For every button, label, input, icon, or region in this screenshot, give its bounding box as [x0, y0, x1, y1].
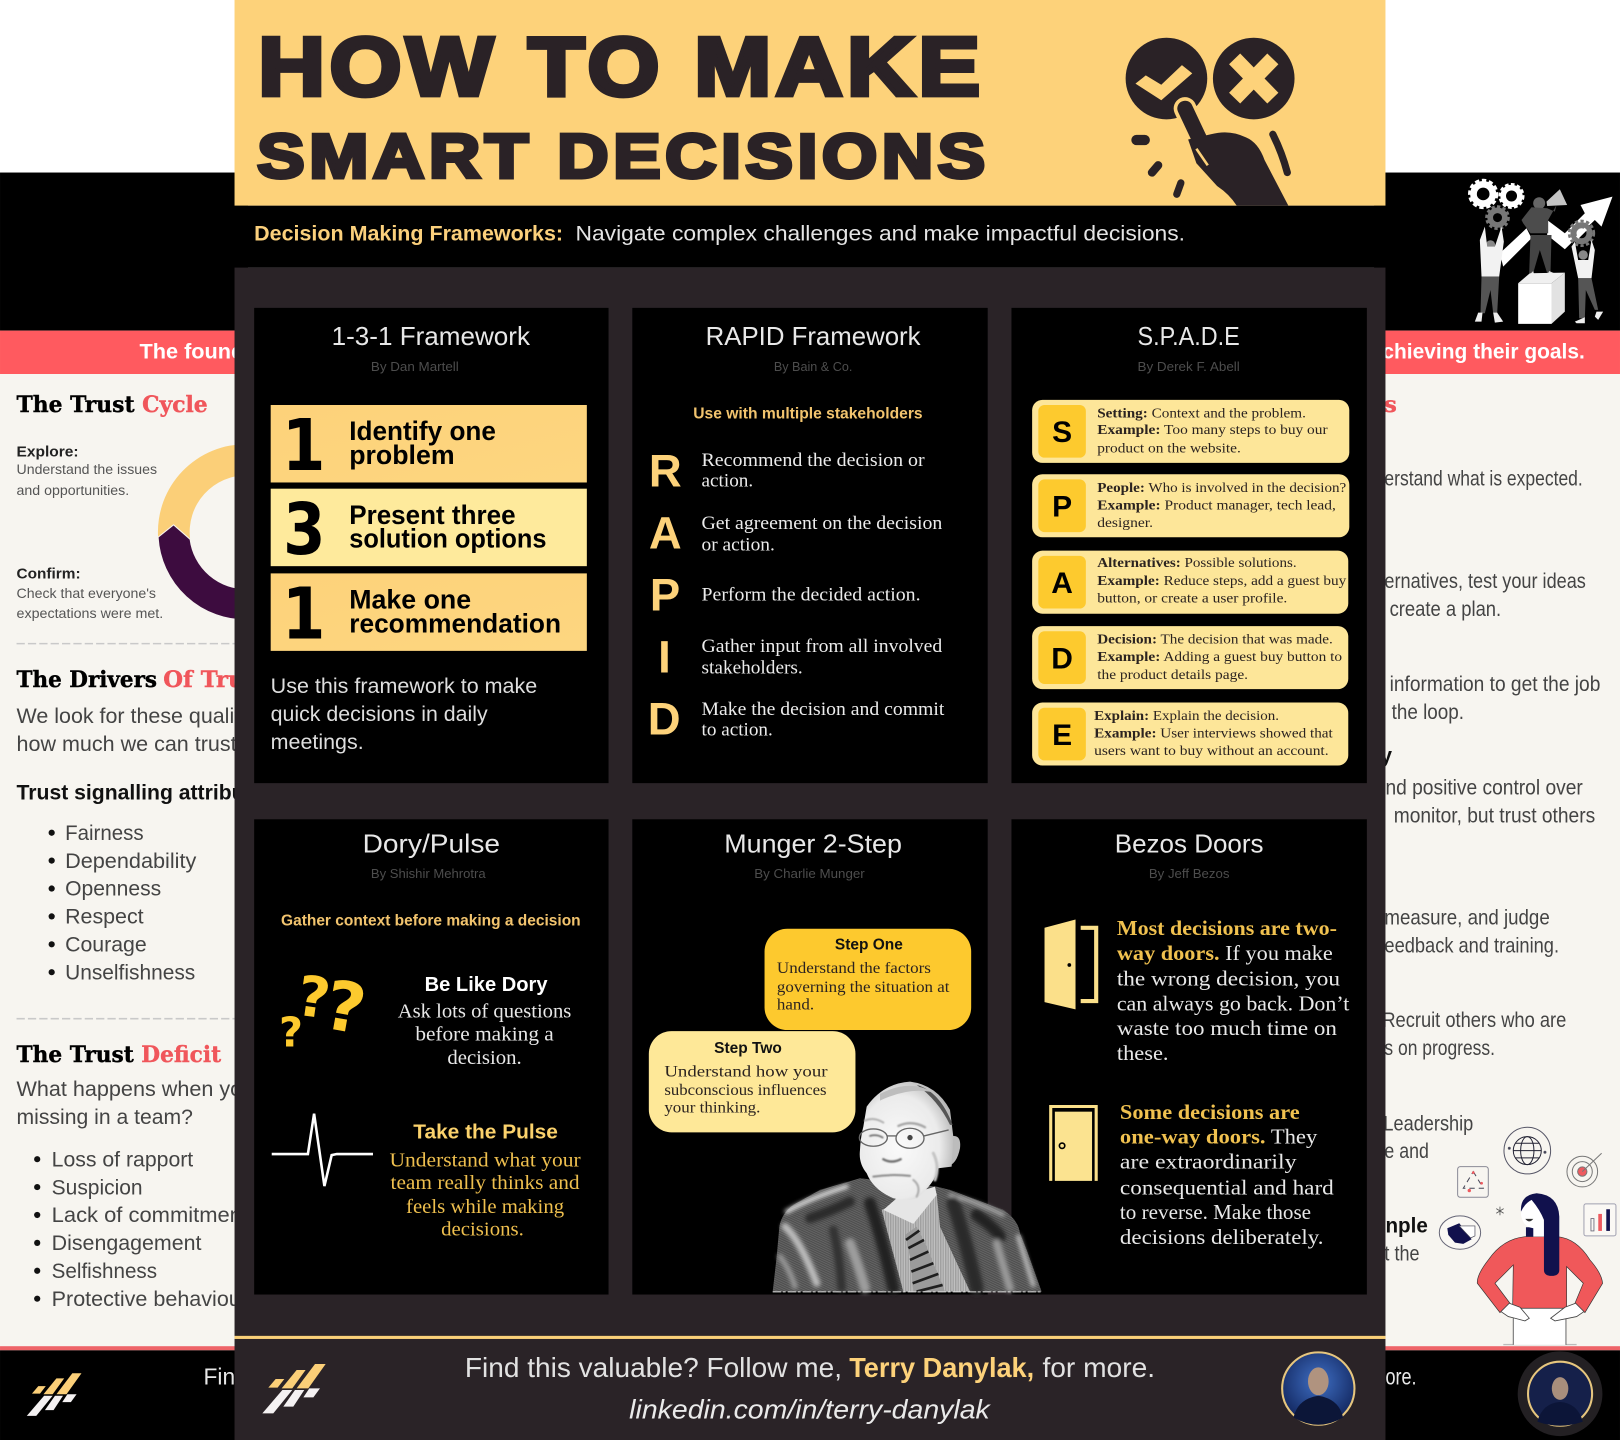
- icon: question marks: ?: [319, 966, 371, 1051]
- speech bubble: step one: governing the situation at: [777, 979, 950, 996]
- panel: Munger 2-Step: [632, 819, 988, 1295]
- gear above right person: [1569, 221, 1594, 246]
- icon: bar chart: [1584, 1204, 1616, 1236]
- RAPID descriptions: Gather input from all involved: [702, 636, 943, 657]
- icon: pulse line: [272, 1114, 373, 1186]
- header band: [235, 0, 1385, 206]
- avatar: author: [1282, 1352, 1354, 1425]
- background: right infographic page: s: [1384, 392, 1397, 418]
- Be Like Dory: [398, 973, 571, 1069]
- RAPID descriptions: or action.: [702, 535, 775, 556]
- row: alternatives: A: [1051, 567, 1073, 600]
- speech bubble: step two: Understand how your: [664, 1064, 829, 1081]
- background: right infographic page: s on progress.: [1384, 1037, 1495, 1060]
- follow call to action: Find this valuable? Follow me,: [465, 1352, 842, 1383]
- background: right infographic page: t the: [1384, 1242, 1420, 1265]
- icon: recycle box: [1458, 1167, 1488, 1197]
- subtitle: Navigate complex challenges and make impactful decisions.: [575, 221, 1185, 246]
- box: [1518, 273, 1565, 324]
- panel: Dory/Pulse: By Shishir Mehrotra: [371, 866, 486, 881]
- background: right infographic page: information to get the job: [1390, 673, 1600, 696]
- portrait: Charlie Munger sketch: [773, 1082, 1042, 1292]
- background: left infographic page: Loss of rapport: [52, 1148, 193, 1171]
- step: make one recommendation: [271, 572, 587, 655]
- icon: target: [1567, 1153, 1602, 1187]
- man with megaphone on box: [1522, 189, 1567, 277]
- step: make one recommendation: recommendation: [349, 608, 561, 638]
- usage note: meetings.: [271, 729, 364, 754]
- background: right infographic page: chieving their goals.: [1382, 339, 1585, 364]
- row: decision: [1032, 626, 1348, 689]
- icon: open door: [1045, 920, 1096, 1009]
- panel: RAPID framework: Use with multiple stakeholders: [693, 405, 923, 422]
- panel: Munger 2-Step: By Charlie Munger: [754, 866, 865, 881]
- two-way doors text: the wrong decision, you: [1117, 969, 1340, 991]
- Be Like Dory: before making a: [415, 1024, 554, 1045]
- background: left infographic page: how much we can trust: [17, 733, 237, 756]
- subtitle: Decision Making Frameworks:: [254, 221, 563, 246]
- usage note: [271, 673, 537, 754]
- footer: [235, 1336, 1385, 1425]
- gears: [1470, 180, 1523, 229]
- background: left infographic page: Understand the issues: [17, 461, 157, 477]
- step: present three options: [271, 488, 587, 571]
- RAPID descriptions: Get agreement on the decision: [702, 513, 943, 534]
- suit shading strokes: [780, 1187, 1033, 1288]
- rough bottom edge: [773, 1290, 1042, 1293]
- RAPID descriptions: Perform the decided action.: [702, 584, 921, 605]
- row: explain: Example: User interviews showed that: [1094, 727, 1333, 742]
- usage note: Use this framework to make: [271, 673, 537, 698]
- growth arrow: [1500, 228, 1532, 267]
- two-way doors text: Most decisions are two-: [1117, 918, 1337, 940]
- icon: choosing check or cross: [1126, 38, 1295, 206]
- background: left infographic page: The Trust Deficit: [17, 1042, 222, 1068]
- Be Like Dory: decision.: [447, 1048, 522, 1069]
- speech bubble: step two: your thinking.: [664, 1100, 760, 1117]
- logo: [262, 1364, 326, 1413]
- background: right infographic page: measure, and judge: [1384, 907, 1550, 930]
- tie: [905, 1227, 945, 1292]
- title: HOW TO MAKE: [258, 20, 985, 113]
- background: left infographic page: Confirm:: [17, 566, 81, 583]
- background: right infographic page: ore.: [1385, 1363, 1416, 1389]
- background: left infographic page: The Drivers: [17, 667, 157, 693]
- speech bubble: step one: Understand the factors: [777, 960, 931, 977]
- follow call to action: for more.: [1042, 1352, 1155, 1383]
- row: setting: S: [1052, 416, 1072, 449]
- row: setting: Setting: Context and the problem.: [1097, 406, 1306, 421]
- linkedin url: linkedin.com/in/terry-danylak: [629, 1395, 991, 1425]
- row: alternatives: button, or create a user profile.: [1097, 591, 1287, 606]
- RAPID letters: A: [649, 508, 682, 559]
- usage note: quick decisions in daily: [271, 701, 488, 726]
- follow call to action: [465, 1352, 1155, 1383]
- background: left infographic page: expectations were met.: [17, 605, 163, 621]
- Take the Pulse: feels while making: [406, 1197, 564, 1218]
- row: explain: Explain: Explain the decision.: [1094, 709, 1279, 724]
- panel: Bezos Doors: [1011, 819, 1367, 1295]
- icon: question marks: ?: [279, 1009, 303, 1057]
- background: left infographic page: Disengagement: [52, 1232, 202, 1255]
- background: right infographic page: Recruit others who are: [1382, 1009, 1566, 1032]
- row: people: P: [1052, 491, 1072, 524]
- one-way doors text: consequential and hard: [1120, 1177, 1335, 1199]
- title: [257, 20, 990, 192]
- speech bubble: step two: [649, 1031, 855, 1132]
- right person: [1572, 240, 1603, 323]
- Take the Pulse: team really thinks and: [391, 1173, 580, 1194]
- row: explain: users want to buy without an account.: [1094, 744, 1329, 759]
- row: alternatives: Example: Reduce steps, add a guest buy: [1097, 574, 1346, 589]
- panel: SPADE: S.P.A.D.E: [1138, 323, 1240, 351]
- RAPID descriptions: [702, 450, 945, 741]
- follow call to action: Terry Danylak,: [849, 1352, 1034, 1383]
- background: left infographic page: Courage: [65, 934, 147, 957]
- two-way doors text: [1117, 918, 1350, 1065]
- panel: 1-3-1 framework: By Dan Martell: [371, 359, 459, 374]
- speech bubble: step one: [765, 929, 971, 1030]
- RAPID letters: P: [650, 570, 680, 621]
- background: right infographic page: e and: [1384, 1140, 1429, 1163]
- panel: Bezos Doors: Bezos Doors: [1115, 830, 1264, 858]
- step: make one recommendation: 1: [282, 572, 325, 655]
- row: decision: Decision: The decision that was made.: [1097, 633, 1333, 648]
- step: make one recommendation: Make one: [349, 585, 471, 615]
- background: right infographic page: ernatives, test your ideas: [1384, 570, 1586, 593]
- two-way doors text: way doors. If you make: [1117, 943, 1333, 965]
- left person: [1475, 227, 1504, 323]
- Take the Pulse: [390, 1121, 581, 1241]
- background: left infographic page: Respect: [65, 906, 144, 929]
- background: left infographic page: [0, 0, 296, 1440]
- background: left infographic page: Fairness: [65, 822, 144, 845]
- row: people: designer.: [1097, 516, 1153, 531]
- speech bubble: step one: hand.: [777, 996, 814, 1013]
- two-way doors text: waste too much time on: [1117, 1018, 1338, 1040]
- illustration: team with gears and growth arrow: [1470, 180, 1612, 324]
- title: SMART DECISIONS: [257, 123, 990, 192]
- background: left infographic page: The foundation: [139, 339, 296, 364]
- subtitle: [254, 221, 1185, 246]
- background: left infographic page: We look for these qualities: [17, 705, 268, 728]
- background: right infographic page: y: [1380, 744, 1392, 767]
- row: decision: Example: Adding a guest buy button to: [1097, 650, 1342, 665]
- speech bubble: step two: subconscious influences: [664, 1082, 827, 1099]
- background: left infographic page: Lack of commitment: [52, 1204, 248, 1227]
- background: left infographic page: Of Trust: [163, 667, 268, 693]
- background: right infographic page: nd positive control over: [1385, 776, 1583, 799]
- ear: [947, 1136, 960, 1167]
- one-way doors text: decisions deliberately.: [1120, 1227, 1323, 1249]
- background: left infographic page: Suspicion: [52, 1176, 143, 1199]
- background: left infographic page: Check that everyone's: [17, 585, 156, 601]
- background: left infographic page: Trust signalling attributes: [17, 782, 275, 805]
- step: present three options: solution options: [349, 524, 547, 554]
- panel: Bezos Doors: By Jeff Bezos: [1149, 866, 1229, 881]
- background: left infographic page: Unselfishness: [65, 961, 195, 984]
- step: present three options: Present three: [349, 500, 516, 530]
- RAPID letters: D: [648, 694, 681, 745]
- row: alternatives: Alternatives: Possible solutions.: [1097, 556, 1297, 571]
- woman figure: [1477, 1193, 1603, 1345]
- Take the Pulse: Understand what your: [390, 1150, 581, 1171]
- row: people: People: Who is involved in the decision?: [1097, 481, 1346, 496]
- row: people: Example: Product manager, tech lead,: [1097, 498, 1336, 513]
- background: left infographic page: Dependability: [65, 850, 197, 873]
- Take the Pulse: Take the Pulse: [413, 1121, 558, 1144]
- panel: RAPID framework: [632, 308, 988, 783]
- background: left infographic page: Explore:: [17, 444, 79, 461]
- icon: closed door: [1051, 1107, 1096, 1181]
- two-way doors text: can always go back. Don’t: [1117, 993, 1350, 1015]
- background: left infographic page: Openness: [65, 878, 161, 901]
- head: [860, 1082, 953, 1200]
- icon: handshake: [1439, 1216, 1481, 1249]
- background: left infographic page: What happens when you: [17, 1078, 254, 1101]
- one-way doors text: to reverse. Make those: [1120, 1202, 1311, 1224]
- background: right infographic page: eedback and training.: [1384, 935, 1559, 958]
- background: left infographic page: Selfishness: [52, 1260, 157, 1283]
- panel: SPADE: By Derek F. Abell: [1138, 359, 1240, 374]
- speech bubble: step two: Step Two: [714, 1040, 782, 1057]
- RAPID letters: I: [658, 632, 671, 683]
- panel: SPADE: [1011, 308, 1367, 783]
- row: setting: [1032, 400, 1349, 463]
- Be Like Dory: Be Like Dory: [425, 973, 548, 996]
- icon: question marks: [279, 964, 371, 1057]
- panel: Dory/Pulse: Dory/Pulse: [363, 830, 500, 858]
- RAPID descriptions: Recommend the decision or: [702, 450, 926, 471]
- background: left infographic page: missing in a team?: [17, 1106, 193, 1129]
- shirt: [882, 1193, 970, 1292]
- background: right infographic page: create a plan.: [1390, 598, 1501, 621]
- background: left infographic page: The Trust Cycle: [17, 392, 208, 418]
- one-way doors text: one-way doors. They: [1120, 1127, 1318, 1149]
- one-way doors text: [1120, 1102, 1335, 1249]
- facial features: [865, 1119, 937, 1197]
- step: identify one problem: Identify one: [349, 416, 496, 446]
- speech bubble: step one: Step One: [835, 936, 903, 953]
- row: alternatives: [1032, 551, 1348, 614]
- glasses: [859, 1128, 949, 1148]
- avatar: right page: [1518, 1351, 1602, 1436]
- panel: Munger 2-Step: Munger 2-Step: [724, 830, 902, 858]
- background: right infographic page: nple: [1385, 1213, 1428, 1238]
- step: identify one problem: problem: [349, 440, 455, 470]
- step: identify one problem: 1: [282, 404, 325, 487]
- background: right infographic page: Leadership: [1383, 1112, 1473, 1135]
- RAPID descriptions: Make the decision and commit: [702, 699, 945, 720]
- RAPID descriptions: action.: [702, 471, 753, 492]
- suit: [773, 1178, 1042, 1292]
- step: present three options: 3: [283, 488, 325, 571]
- illustration: woman with business icons: [1439, 1127, 1616, 1345]
- RAPID letters: R: [649, 446, 682, 497]
- icon: globe: [1504, 1127, 1551, 1174]
- icon: question marks: ?: [293, 964, 334, 1033]
- one-way doors text: Some decisions are: [1120, 1102, 1300, 1124]
- panel: Dory/Pulse: Gather context before making a decision: [281, 913, 581, 930]
- background: left infographic page: Protective behaviour: [52, 1288, 248, 1311]
- step: identify one problem: [271, 404, 587, 487]
- background: right infographic page: the loop.: [1392, 701, 1464, 724]
- background: left infographic page: Find: [204, 1363, 248, 1389]
- row: people: [1032, 474, 1349, 537]
- panel: Dory/Pulse: [254, 819, 609, 1295]
- two-way doors text: these.: [1117, 1043, 1169, 1065]
- panel: 1-3-1 framework: [254, 308, 609, 783]
- row: explain: E: [1052, 719, 1072, 752]
- RAPID descriptions: stakeholders.: [702, 658, 803, 679]
- Be Like Dory: Ask lots of questions: [398, 1002, 571, 1023]
- row: setting: product on the website.: [1097, 442, 1241, 457]
- icon: sparkle: [1496, 1207, 1504, 1215]
- one-way doors text: are extraordinarily: [1120, 1151, 1297, 1173]
- row: decision: D: [1051, 642, 1073, 675]
- panel: RAPID framework: RAPID Framework: [706, 323, 921, 351]
- background: right infographic page: monitor, but trust others: [1394, 804, 1595, 827]
- background: right infographic page: [1374, 0, 1620, 1440]
- Take the Pulse: decisions.: [441, 1220, 524, 1241]
- row: explain: [1032, 703, 1348, 766]
- row: setting: Example: Too many steps to buy our: [1097, 423, 1328, 438]
- background: left infographic page: and opportunities.: [17, 482, 129, 498]
- RAPID letters: [648, 446, 682, 745]
- main panel backdrop: [235, 206, 1385, 1440]
- row: decision: the product details page.: [1097, 668, 1248, 683]
- RAPID descriptions: to action.: [702, 720, 773, 741]
- panel: RAPID framework: By Bain & Co.: [774, 359, 852, 374]
- panel: 1-3-1 framework: 1-3-1 Framework: [332, 323, 530, 351]
- background: right infographic page: erstand what is expected.: [1384, 468, 1583, 491]
